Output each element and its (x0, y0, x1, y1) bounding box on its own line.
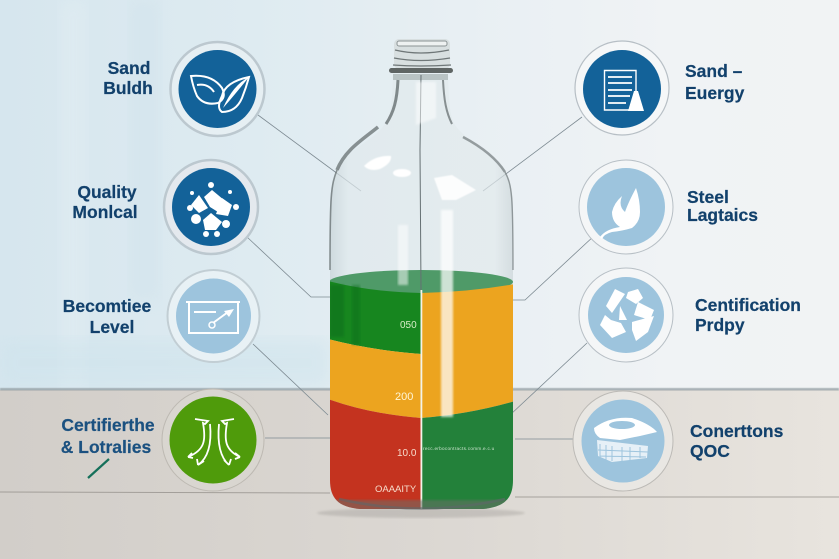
bottle scale values: 200 (395, 391, 413, 403)
item: Steel Lagtaics (579, 160, 758, 254)
item: Sand Euergy: Euergy (685, 83, 745, 103)
label: Becomtiee (63, 296, 152, 316)
bottle dark edges (330, 75, 513, 508)
item: Conerttons QOC (573, 391, 784, 491)
background floor (0, 388, 839, 559)
label: Centification (695, 295, 801, 315)
icon: board (168, 270, 260, 362)
item: Steel Lagtaics: Lagtaics (687, 205, 758, 225)
bottle neck threads (389, 39, 453, 80)
item: Conerttons QOC: QOC (690, 441, 730, 461)
label: Sand (108, 58, 150, 78)
item: Sand Euergy (575, 41, 745, 135)
icon: leaves (170, 42, 264, 136)
item: Sand Buldh: Buldh (103, 78, 153, 98)
icon: stadium (573, 391, 673, 491)
icon: sprouts (162, 389, 264, 491)
item: Centification Prdpy (579, 268, 801, 362)
glass bottle (328, 39, 515, 512)
bottle scale values: recc.erbocontracts.comm.e.c.u (423, 446, 495, 451)
liquid bands (328, 270, 515, 512)
icon: recycle (579, 268, 673, 362)
icon: flame leaf (579, 160, 673, 254)
label: Steel (687, 187, 729, 207)
connector lines (247, 115, 595, 439)
item: Becomtiee Level (63, 270, 260, 362)
item: Sand Buldh (103, 42, 264, 136)
icon: document (575, 41, 669, 135)
accent stroke (88, 459, 109, 478)
background wall (0, 0, 839, 392)
item: Certifierthe & Lotralies (61, 389, 264, 491)
bottle highlights (364, 82, 476, 417)
item: Certifierthe & Lotralies: & Lotralies (61, 437, 151, 457)
item: Quality Monlcal: Monlcal (72, 202, 138, 222)
label: Conerttons (690, 421, 784, 441)
item: Becomtiee Level: Level (90, 317, 134, 337)
label: Sand – (685, 61, 743, 81)
label: Certifierthe (61, 415, 155, 435)
item: Quality Monlcal (72, 160, 258, 254)
bottle scale values: 10.0 (397, 448, 417, 459)
bottle scale values: 050 (400, 320, 417, 331)
bottle scale values (375, 320, 495, 495)
icon: flower (164, 160, 258, 254)
label: Quality (77, 182, 137, 202)
bottle scale values: OAAAITY (375, 484, 417, 495)
item: Centification Prdpy: Prdpy (695, 315, 745, 335)
bottle glass body (330, 74, 513, 509)
